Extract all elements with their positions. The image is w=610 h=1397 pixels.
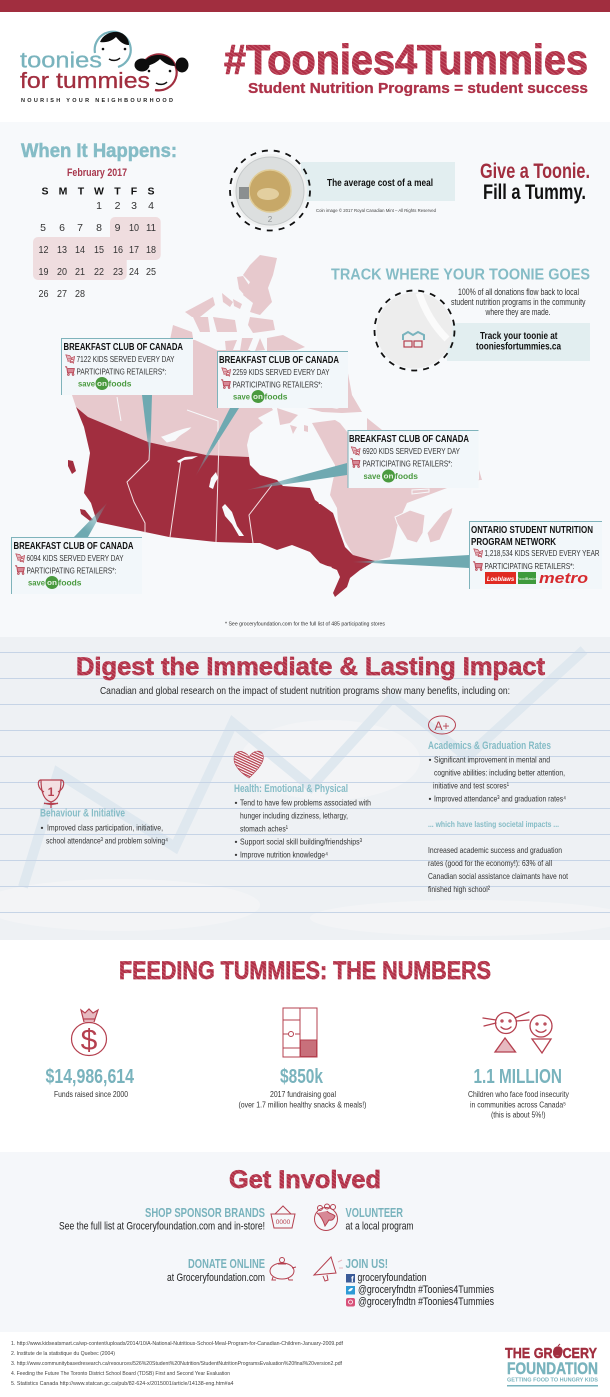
map: provinces lines and lakes	[127, 440, 332, 569]
icon: piggy bank	[270, 1258, 296, 1280]
icon: A plus grade	[428, 716, 456, 734]
instagram: @groceryfndtn #Toonies4Tummies	[358, 1296, 494, 1308]
kids served: 6094 KIDS SERVED EVERY DAY	[26, 553, 124, 563]
bullet list: Improved attendance³ and graduation rates⁴	[434, 794, 566, 804]
text: donations flow back	[451, 287, 586, 317]
text: website: tooniesfortummies.ca	[476, 340, 561, 352]
icon: trophy: 1	[48, 785, 55, 799]
heading: JOIN US!	[346, 1256, 388, 1271]
bullet list: Improve nutrition knowledge⁴	[240, 850, 328, 860]
calendar days: 18	[146, 244, 156, 256]
heading: Health: Emotional & Physical	[234, 783, 348, 795]
bullet list: •	[428, 794, 432, 804]
calendar month: February 2017	[67, 167, 127, 179]
heading: Academics & Graduation Rates	[428, 740, 551, 752]
logo tagline: NOURISH YOUR NEIGHBOURHOOD	[21, 98, 173, 104]
calendar days: T	[114, 186, 121, 198]
icon: A plus grade: A+	[434, 719, 450, 733]
column: health	[234, 751, 371, 860]
caption line two: (over 1.7 million healthy snacks & meals!)	[238, 1100, 367, 1110]
footnote: participating stores: * See groceryfoundation.com for the full list of 485 participating stores	[225, 622, 385, 628]
bullet list: •	[40, 822, 44, 832]
bullet list: •	[234, 836, 238, 846]
footnotes: 3. http://www.communitybasedresearch.ca/resources/526%20Student%20Nutrition/StudentNutritionProgramsEvaluation%20final%20version2.pdf	[11, 1361, 342, 1367]
calendar days: 2	[115, 200, 121, 212]
calendar days: S	[41, 186, 49, 198]
text: average cost: The average cost of a meal	[327, 177, 433, 189]
panel: get involved	[0, 1152, 610, 1332]
bullet list: school attendance³ and problem solving⁴	[46, 836, 168, 846]
heading: VOLUNTEER	[346, 1205, 403, 1220]
program name: BREAKFAST CLUB OF CANADA	[219, 354, 339, 366]
callout: British Columbia south	[11, 537, 142, 594]
retailers: PARTICIPATING RETAILERS*:	[232, 380, 322, 390]
calendar days: 19	[38, 266, 49, 278]
calendar days: 15	[94, 244, 104, 256]
text: track your toonie: Track your toonie at	[480, 330, 558, 342]
icon: boy face	[95, 32, 131, 67]
calendar days	[38, 186, 156, 300]
heading: Behaviour & Initiative	[40, 808, 125, 820]
calendar days: 1	[96, 200, 102, 212]
retailer logo: on	[384, 474, 394, 480]
retailer logos: FoodBasics	[517, 576, 537, 581]
retailer logo: foods	[395, 471, 418, 481]
bullet list: cognitive abilities: including better attention,	[434, 768, 565, 778]
calendar days: 21	[75, 266, 85, 278]
text: donations flow back: where they are made.	[485, 307, 550, 317]
program name: BREAKFAST CLUB OF CANADA	[64, 341, 183, 353]
bullet list: stomach aches¹	[240, 824, 288, 834]
calendar days: T	[78, 186, 85, 198]
column: behaviour and initiative	[38, 780, 168, 846]
calendar days: 20	[57, 266, 67, 278]
retailer logo	[28, 576, 82, 589]
calendar days: 24	[129, 266, 139, 278]
top red bar	[0, 0, 610, 12]
retailer logo: foods	[58, 578, 82, 588]
calendar days: 11	[146, 222, 156, 234]
text: at a local program	[346, 1220, 414, 1232]
caption: Funds raised since 2000	[54, 1089, 128, 1099]
heading: SHOP SPONSOR BRANDS	[145, 1205, 265, 1220]
icon: basket	[271, 1206, 295, 1228]
map: highlighted provinces	[76, 407, 375, 597]
icon: globe	[314, 1204, 338, 1230]
text: societal impact paragraph	[428, 845, 568, 894]
logo: the grocery foundation	[505, 1344, 599, 1386]
bullet list: •	[428, 754, 432, 764]
action: shop sponsor brands	[59, 1205, 295, 1232]
text: lasting societal impacts: ... which have lasting societal impacts ...	[428, 819, 559, 829]
bullet list: hunger including dizziness, lethargy,	[240, 810, 348, 820]
retailer logo: save	[78, 378, 95, 388]
calendar days: 12	[38, 244, 49, 256]
icon: money bag: $	[81, 1024, 98, 1057]
heading: when it happens: When It Happens:	[21, 141, 177, 162]
calendar days: 6	[59, 222, 65, 234]
bullet list: •	[234, 798, 238, 808]
caption: Children who face food insecurity	[468, 1089, 570, 1099]
value: $850k	[280, 1066, 324, 1088]
program name line two: PROGRAM NETWORK	[471, 536, 556, 548]
calendar days: 9	[115, 222, 121, 234]
calendar days: 5	[40, 222, 46, 234]
bullet list	[428, 754, 566, 804]
caption: (this is about 5%!)	[491, 1110, 546, 1120]
text: See the full list at Groceryfoundation.com and in-store!	[59, 1220, 265, 1232]
calendar highlight	[33, 217, 161, 280]
calendar days: 17	[129, 244, 139, 256]
map: northern territories and Atlantic provinces	[72, 255, 482, 561]
logo: toonies for tummies	[20, 32, 188, 104]
calendar days: 14	[75, 244, 85, 256]
facebook: f	[351, 1275, 354, 1284]
icon: two children	[483, 1012, 552, 1053]
map: Vancouver Island and Manitoulin	[68, 460, 93, 521]
caption line one: 2017 fundraising goal	[270, 1089, 336, 1099]
value: $14,986,614	[46, 1066, 135, 1088]
map: white territory lines	[117, 397, 218, 442]
calendar days: 22	[94, 266, 104, 278]
subheading: Canadian and global research on the impact of student nutrition programs show many benefits, including on:	[100, 685, 510, 697]
calendar days: 25	[146, 266, 156, 278]
calendar days: 16	[113, 244, 123, 256]
footnotes: 4. Feeding the Future The Toronto District School Board (TDSB) First and Second Year Evaluation	[11, 1371, 230, 1377]
calendar days: 3	[131, 200, 137, 212]
callout: British Columbia and Alberta	[61, 338, 193, 395]
calendar days: S	[147, 186, 155, 198]
map of Canada	[68, 255, 482, 597]
text: societal impact paragraph: finished high school²	[428, 884, 490, 894]
program name: BREAKFAST CLUB OF CANADA	[14, 540, 134, 552]
retailer logo: foods	[108, 378, 132, 388]
facebook: groceryfoundation	[358, 1272, 426, 1284]
bullet list: •	[234, 850, 238, 860]
icon: local map circle	[374, 290, 454, 370]
panel: the numbers	[0, 940, 610, 1152]
text: societal impact paragraph: Increased academic success and graduation	[428, 845, 562, 855]
heading: feeding tummies the numbers: FEEDING TUMMIES: THE NUMBERS	[119, 957, 491, 985]
callout: Ontario	[469, 521, 602, 589]
program name: BREAKFAST CLUB OF CANADA	[349, 433, 469, 445]
icon: apple	[553, 1344, 563, 1356]
title: #Toonies4Tummies	[224, 36, 588, 83]
retailer logo: on	[47, 580, 57, 587]
logo text: toonies: toonies	[20, 48, 102, 72]
callout: track your toonie	[447, 323, 590, 361]
calendar days: 28	[75, 288, 85, 300]
calendar	[33, 167, 161, 300]
calendar days: 4	[148, 200, 154, 212]
bullet list: Tend to have few problems associated with	[240, 798, 371, 808]
retailer logos	[485, 570, 588, 587]
value: 1.1 MILLION	[474, 1066, 562, 1088]
footnotes: 5. Statistics Canada http://www.statcan.gc.ca/pub/82-624-x/2015001/article/14138-eng.htm#a4	[11, 1381, 234, 1387]
retailer logo: save	[233, 392, 250, 402]
callout: average cost of a meal	[301, 162, 455, 201]
icon: basket: 0000	[276, 1219, 291, 1226]
retailer logo: on	[253, 394, 263, 401]
retailer logo	[364, 470, 418, 482]
retailers: PARTICIPATING RETAILERS*:	[76, 366, 166, 376]
bullet list: Improved class participation, initiative,	[47, 822, 163, 832]
callout: Northwest Territories and Saskatchewan	[217, 351, 348, 408]
calendar days: M	[59, 186, 68, 198]
calendar days: 7	[77, 222, 83, 234]
retailer logo: foods	[264, 392, 288, 402]
calendar days: 23	[113, 266, 123, 278]
action: join us	[314, 1256, 494, 1308]
calendar days: 10	[129, 222, 139, 234]
footnotes: 1. http://www.kidseatsmart.ca/wp-content/uploads/2014/10/A-National-Nutritious-School-Meal-Program-for-Canadian-Children-January-2009.pdf	[11, 1341, 343, 1347]
icon: heart	[234, 751, 263, 778]
twitter: @groceryfndtn #Toonies4Tummies	[358, 1284, 494, 1296]
retailer logo: save	[28, 578, 45, 588]
retailers: PARTICIPATING RETAILERS*:	[362, 458, 452, 468]
kids served: 6920 KIDS SERVED EVERY DAY	[362, 446, 460, 456]
icon: bar gauge	[283, 1008, 317, 1057]
action: donate online	[167, 1256, 296, 1284]
column: academics	[428, 716, 568, 894]
callout: Manitoba	[348, 430, 478, 488]
footnotes: 2. Institute de la statistique du Quebec (2004)	[11, 1351, 115, 1357]
calendar days: 26	[38, 288, 49, 300]
stat: children facing food insecurity	[468, 1012, 570, 1120]
kids served: 2259 KIDS SERVED EVERY DAY	[232, 367, 330, 377]
caption: in communities across Canada⁵	[470, 1100, 566, 1110]
logo tagline: GETTING FOOD TO HUNGRY KIDS	[507, 1378, 599, 1384]
retailer logo: save	[364, 471, 381, 481]
text: societal impact paragraph: rates (good for the economy!): 63% of all	[428, 858, 552, 868]
panel: when and where	[0, 122, 610, 637]
icon: girl face	[134, 54, 188, 90]
action: volunteer	[314, 1204, 414, 1232]
retailer logos: Loeblaws	[487, 577, 515, 583]
bullet list	[234, 798, 371, 860]
subtitle: Student Nutrition Programs = student success	[248, 80, 588, 97]
retailer logo	[78, 377, 132, 390]
stat: funds raised	[46, 1009, 135, 1099]
facebook	[346, 1272, 426, 1284]
text: coin credit: Coin image © 2017 Royal Canadian Mint – All Rights Reserved	[316, 207, 436, 213]
calendar days: F	[131, 186, 138, 198]
calendar days: W	[94, 186, 104, 198]
footnotes	[11, 1341, 343, 1387]
calendar days: 8	[96, 222, 102, 234]
heading: get involved: Get Involved	[229, 1166, 381, 1194]
text: at Groceryfoundation.com	[167, 1272, 265, 1284]
caption	[468, 1089, 570, 1120]
heading: digest the immediate and lasting impact: Digest the Immediate & Lasting Impact	[76, 653, 546, 681]
pointers to the provinces	[74, 395, 469, 568]
logo text: for tummies: for tummies	[20, 68, 150, 93]
bullet list: Significant improvement in mental and	[434, 754, 550, 764]
retailers: PARTICIPATING RETAILERS*:	[484, 561, 574, 571]
retailer logo: on	[97, 381, 107, 388]
calendar days: 13	[57, 244, 67, 256]
kids served: 7122 KIDS SERVED EVERY DAY	[76, 354, 175, 364]
calendar days: 27	[57, 288, 67, 300]
retailer logos: metro	[539, 570, 588, 587]
icon: toonie coin: 2	[268, 215, 273, 224]
icon: toonie coin	[230, 150, 310, 230]
bullet list: Support social skill building/friendships³	[240, 836, 362, 846]
retailer logo	[233, 390, 288, 403]
stat: fundraising goal	[238, 1008, 367, 1110]
heading: DONATE ONLINE	[188, 1256, 265, 1271]
icon: megaphone	[314, 1257, 343, 1281]
retailers: PARTICIPATING RETAILERS*:	[26, 566, 116, 576]
panel: digest the impact	[0, 637, 610, 940]
text: societal impact paragraph: Canadian social assistance claimants have not	[428, 871, 568, 881]
bullet list: initiative and test scores¹	[433, 780, 509, 790]
heading: track where your toonie goes: TRACK WHERE YOUR TOONIE GOES	[331, 266, 590, 284]
bullet list	[40, 822, 168, 846]
